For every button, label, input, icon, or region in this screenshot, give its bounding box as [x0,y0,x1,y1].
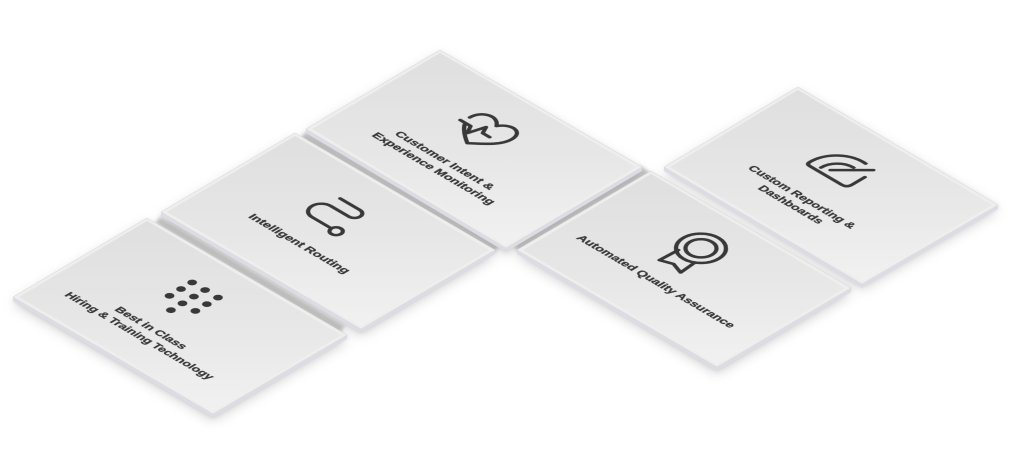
label: Experience Monitoring: Experience Monitoring [369,131,498,207]
label: Intelligent Routing: Intelligent Routing [245,213,353,276]
card: Custom Reporting & Dashboards [664,87,998,288]
card: Automated Quality Assurance [517,171,851,371]
label: Best in Class: Best in Class [111,305,190,351]
gap shadow bands between cards [155,132,651,333]
icon: heart with pulse [444,108,522,154]
icon: dashboard gauge [806,146,877,188]
card: Intelligent Routing [161,133,495,333]
label: Customer Intent &: Customer Intent & [391,130,497,192]
label: Hiring & Training Technology: Hiring & Training Technology [61,291,217,382]
shadows beneath all cards [13,56,998,420]
label: Dashboards: Dashboards [755,184,826,226]
tight contact shadows [12,52,1000,418]
label: Custom Reporting &: Custom Reporting & [745,164,858,231]
icon: routing path [298,194,371,237]
icon: dot grid [151,278,225,322]
card: Customer Intent & Experience Monitoring [306,50,642,252]
icon: award ribbon [652,228,736,277]
card: Best in Class Hiring & Training Technology [13,218,347,418]
label: Automated Quality Assurance: Automated Quality Assurance [573,234,738,330]
